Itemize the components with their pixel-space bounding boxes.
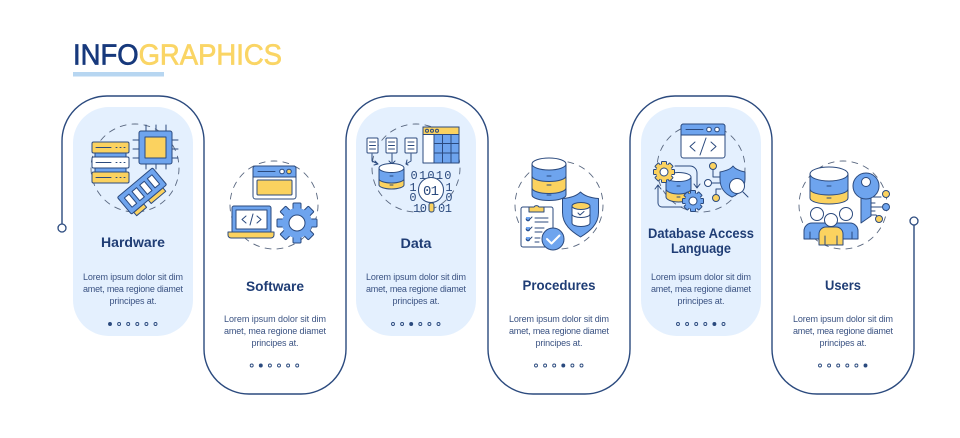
progress dots: step 3	[392, 322, 440, 326]
panel: data	[366, 124, 466, 326]
description: data: amet, mea regione diamet	[366, 284, 466, 294]
heading: users: Users	[825, 277, 861, 293]
description: database access language: amet, mea regione diamet	[651, 284, 751, 294]
progress dots: step 4	[534, 364, 583, 367]
icon: data: 10	[413, 202, 427, 216]
connected timeline outline	[58, 96, 918, 394]
panel: procedures	[509, 158, 609, 367]
panel: users	[793, 161, 893, 367]
icon: software	[228, 161, 318, 249]
progress dots: step 2	[250, 364, 299, 367]
heading: procedures: Procedures	[522, 277, 596, 293]
panel: hardware	[83, 124, 183, 326]
description: users: principes at.	[820, 338, 866, 348]
heading: data: Data	[400, 235, 432, 251]
icon: data: 0	[445, 191, 453, 205]
description: data: Lorem ipsum dolor sit dim	[366, 272, 466, 282]
description: data: principes at.	[392, 296, 440, 306]
progress dots: step 6	[818, 364, 867, 367]
description: users: amet, mea regione diamet	[793, 326, 893, 336]
icon: database access language	[654, 124, 748, 212]
icon: data: 1	[445, 181, 453, 195]
icon: users	[799, 161, 890, 249]
description: procedures: amet, mea regione diamet	[509, 326, 609, 336]
icon: data: 0	[409, 191, 417, 205]
icon: hardware	[91, 124, 179, 218]
description: software: Lorem ipsum dolor sit dim	[224, 314, 326, 324]
icon: data	[367, 124, 460, 216]
icon: data: 01	[423, 184, 439, 200]
panel: database access language	[648, 124, 754, 326]
progress dots: step 1	[108, 322, 157, 326]
heading: hardware: Hardware	[101, 234, 165, 250]
description: procedures: Lorem ipsum dolor sit dim	[509, 314, 609, 324]
description: database access language: principes at.	[678, 296, 724, 306]
description: hardware: amet, mea regione diamet	[83, 284, 183, 294]
heading: database access language: Language	[671, 240, 731, 256]
description: users: Lorem ipsum dolor sit dim	[793, 314, 893, 324]
description: hardware: principes at.	[110, 296, 156, 306]
heading: software: Software	[246, 278, 304, 294]
progress dots: step 5	[676, 322, 725, 326]
description: procedures: principes at.	[536, 338, 582, 348]
panel: software	[224, 161, 326, 367]
title: INFOGRAPHICS	[73, 40, 282, 72]
description: hardware: Lorem ipsum dolor sit dim	[83, 272, 183, 282]
icon: data: 01	[438, 202, 452, 216]
icon: procedures	[515, 158, 603, 250]
description: database access language: Lorem ipsum dolor sit dim	[651, 272, 751, 282]
panel backgrounds: odd steps	[73, 107, 761, 336]
description: software: principes at.	[252, 338, 298, 348]
description: software: amet, mea regione diamet	[224, 326, 326, 336]
icon: data: 1	[409, 181, 417, 195]
icon: data: 01010	[410, 169, 452, 183]
heading: database access language: Database Access	[648, 225, 754, 241]
